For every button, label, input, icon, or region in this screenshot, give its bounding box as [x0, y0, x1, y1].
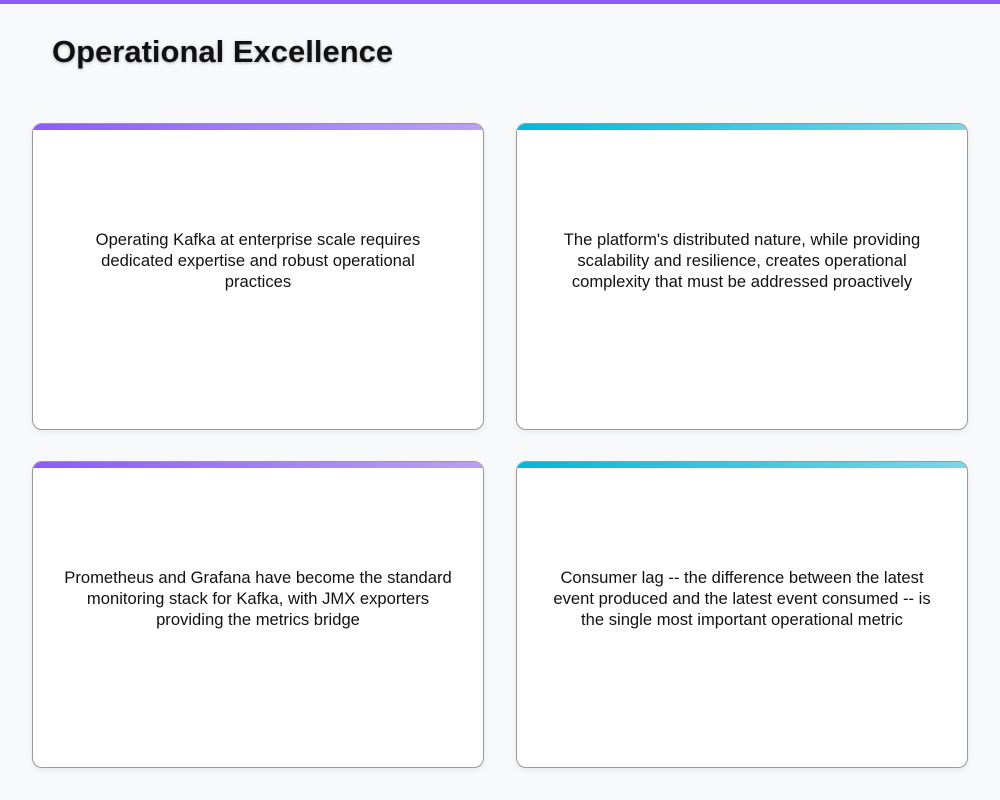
panel: consumer lag: [516, 461, 968, 768]
text: distributed nature: complexity that must be addressed proactively: [572, 272, 912, 291]
text: enterprise scale: practices: [225, 272, 291, 291]
panel: monitoring stack: [32, 461, 484, 768]
text: monitoring stack: providing the metrics bridge: [156, 610, 360, 629]
text: enterprise scale: [96, 230, 420, 291]
text: monitoring stack: monitoring stack for Kafka, with JMX exporters: [87, 589, 429, 608]
panel: distributed nature: [516, 123, 968, 430]
text: consumer lag: [553, 568, 931, 629]
text: enterprise scale: dedicated expertise and robust operational: [101, 251, 415, 270]
text: distributed nature: [564, 230, 920, 291]
text: monitoring stack: Prometheus and Grafana have become the standard: [64, 568, 452, 587]
text: enterprise scale: Operating Kafka at enterprise scale requires: [96, 230, 420, 249]
text: consumer lag: event produced and the latest event consumed -- is: [553, 589, 931, 608]
text: distributed nature: The platform's distributed nature, while providing: [564, 230, 920, 249]
text: monitoring stack: [64, 568, 452, 629]
title: Operational Excellence: [52, 34, 393, 69]
text: consumer lag: Consumer lag -- the difference between the latest: [560, 568, 924, 587]
text: distributed nature: scalability and resilience, creates operational: [577, 251, 907, 270]
text: consumer lag: the single most important operational metric: [581, 610, 903, 629]
panel: enterprise scale: [32, 123, 484, 430]
